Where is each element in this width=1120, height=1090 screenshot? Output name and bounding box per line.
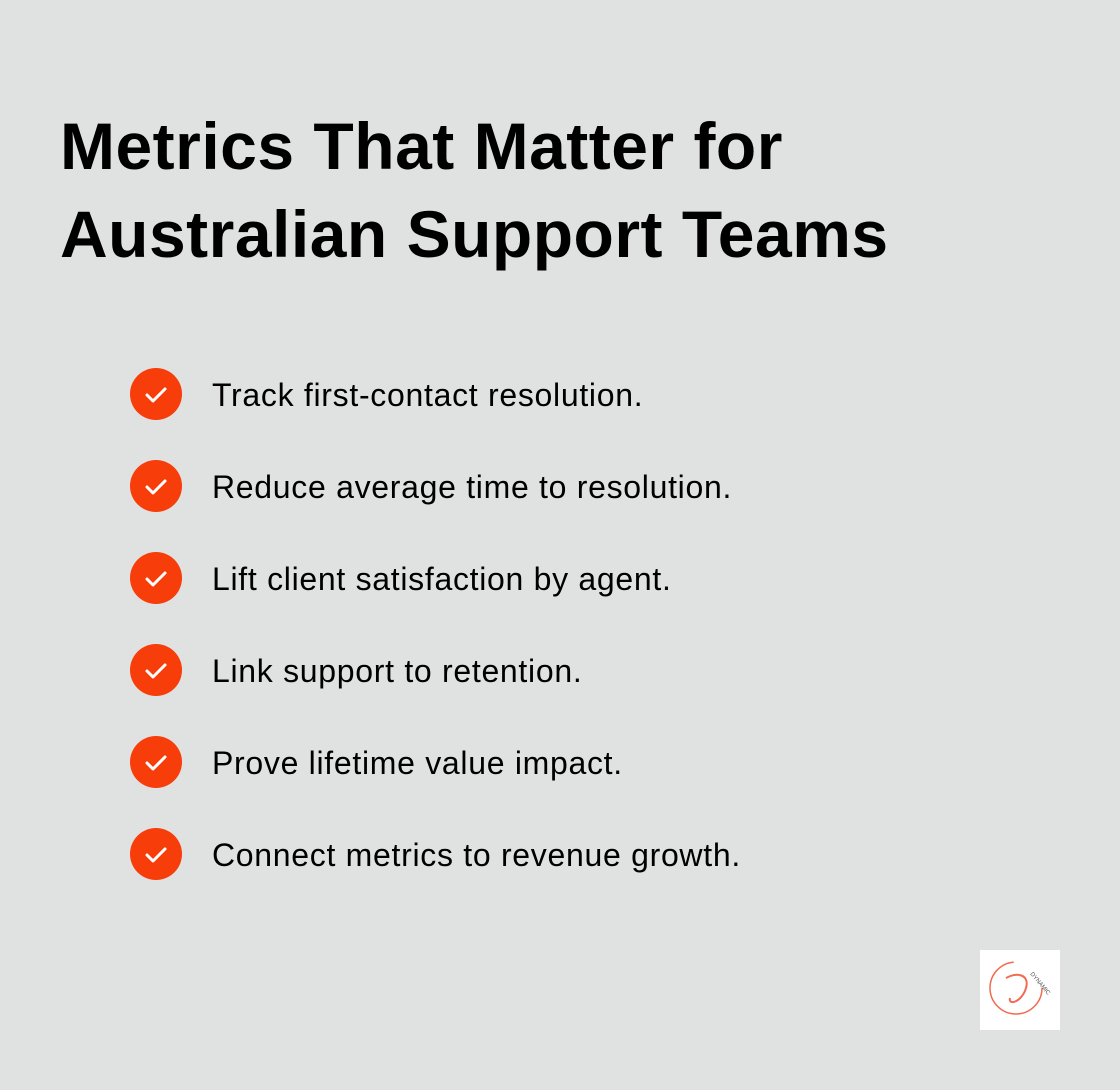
item 1: Track first-contact resolution. (212, 377, 643, 413)
item 3: Lift client satisfaction by agent. (212, 561, 672, 597)
item 6 (130, 828, 741, 880)
item 5: Prove lifetime value impact. (212, 745, 623, 781)
item 1 (130, 368, 643, 420)
title: Metrics That Matter for (60, 109, 783, 183)
item 4 (130, 644, 582, 696)
item 2: Reduce average time to resolution. (212, 469, 732, 505)
checklist (130, 368, 741, 880)
title (60, 109, 889, 271)
logo: DYNAMIC (1028, 971, 1051, 997)
logo (980, 950, 1060, 1030)
item 2 (130, 460, 732, 512)
title: Australian Support Teams (60, 197, 889, 271)
item 3 (130, 552, 672, 604)
item 5 (130, 736, 623, 788)
item 6: Connect metrics to revenue growth. (212, 837, 741, 873)
item 4: Link support to retention. (212, 653, 582, 689)
